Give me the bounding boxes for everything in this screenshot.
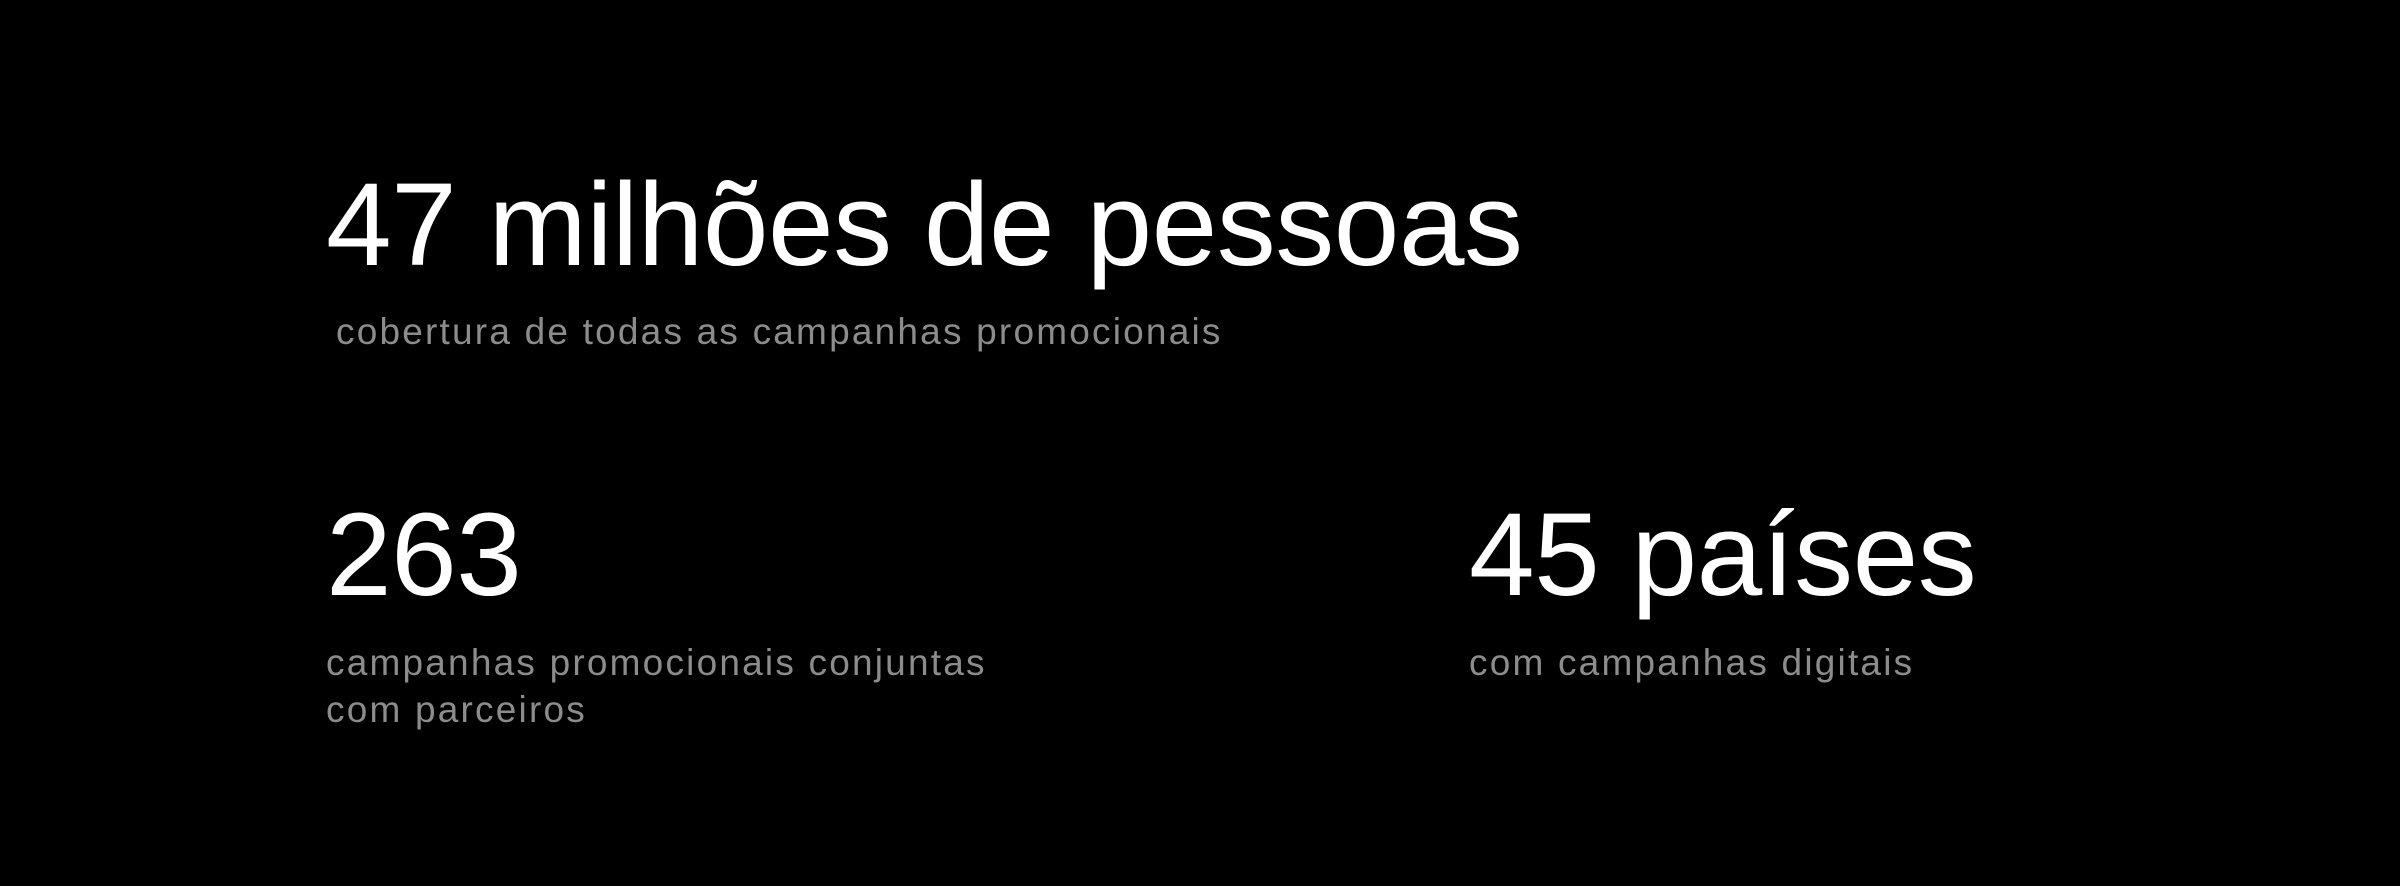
caption: coverage: cobertura de todas as campanhas promocionais (336, 311, 1223, 352)
caption: joint campaigns: campanhas promocionais conjuntas (326, 642, 987, 683)
stat: 45 países: 45 países (1469, 489, 1976, 621)
stat: 47 milhões de pessoas: 47 milhões de pessoas (326, 159, 1522, 291)
stat: 263: 263 (326, 489, 521, 621)
caption: joint campaigns (326, 642, 987, 730)
caption: joint campaigns: com parceiros (326, 689, 587, 730)
caption: digital campaigns: com campanhas digitais (1469, 642, 1914, 683)
